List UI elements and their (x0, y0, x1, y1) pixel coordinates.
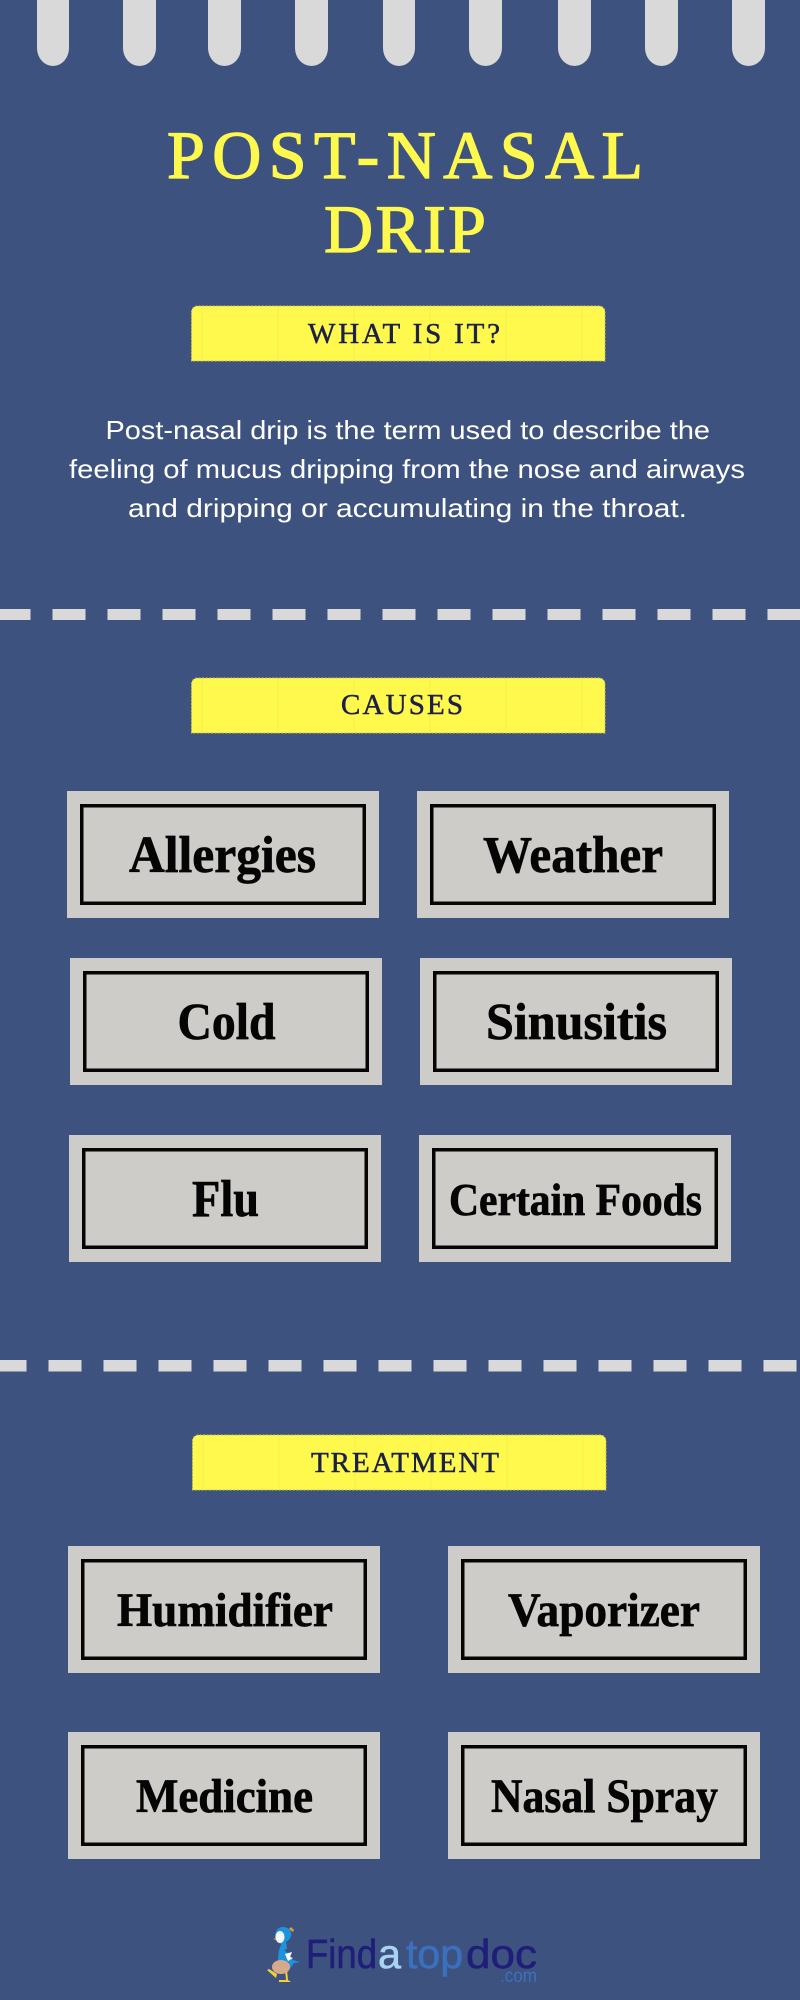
card: sinusitis (420, 958, 732, 1085)
section heading: what is it (192, 306, 605, 361)
description text (69, 415, 745, 523)
logo wordmark: a (378, 1931, 401, 1977)
card: nasal spray (448, 1732, 760, 1859)
description text: and dripping or accumulating in the throat. (128, 493, 687, 523)
card: humidifier: Humidifier (117, 1584, 333, 1637)
card: nasal spray: Nasal Spray (491, 1770, 718, 1823)
panel: treatment cards (68, 1546, 760, 1859)
logo wordmark: .com (500, 1966, 537, 1987)
card: cold: Cold (178, 994, 276, 1051)
card: sinusitis: Sinusitis (486, 994, 667, 1051)
title (167, 117, 643, 267)
section heading: treatment (192, 1435, 606, 1490)
logo wordmark: top (406, 1931, 463, 1977)
description text: feeling of mucus dripping from the nose and airways (69, 454, 745, 484)
logo wordmark: Find (306, 1931, 377, 1977)
logo wordmark: doc (466, 1931, 537, 1977)
card: allergies: Allergies (129, 827, 316, 884)
title: DRIP (324, 191, 486, 267)
card: flu (69, 1135, 381, 1262)
logo: findatopdoc (267, 1927, 537, 1987)
icon: bird mascot (267, 1927, 300, 1982)
card: vaporizer (448, 1546, 760, 1673)
panel: causes cards (67, 791, 732, 1262)
description text: Post-nasal drip is the term used to describe the (106, 415, 710, 445)
logo wordmark (306, 1931, 537, 1987)
card: flu: Flu (192, 1171, 259, 1228)
card: vaporizer: Vaporizer (508, 1584, 700, 1637)
title: POST-NASAL (167, 117, 643, 193)
card: medicine (68, 1732, 380, 1859)
top binding tabs (37, 0, 765, 66)
section heading: causes (192, 678, 605, 733)
section heading: causes: CAUSES (341, 689, 463, 721)
card: certain foods: Certain Foods (449, 1175, 702, 1225)
card: humidifier (68, 1546, 380, 1673)
card: weather: Weather (483, 827, 663, 884)
card: certain foods (419, 1135, 731, 1262)
card: medicine: Medicine (136, 1770, 313, 1823)
card: allergies (67, 791, 379, 918)
card: cold (70, 958, 382, 1085)
section heading: treatment: TREATMENT (311, 1447, 499, 1479)
card: weather (417, 791, 729, 918)
section heading: what is it: WHAT IS IT? (308, 318, 500, 350)
